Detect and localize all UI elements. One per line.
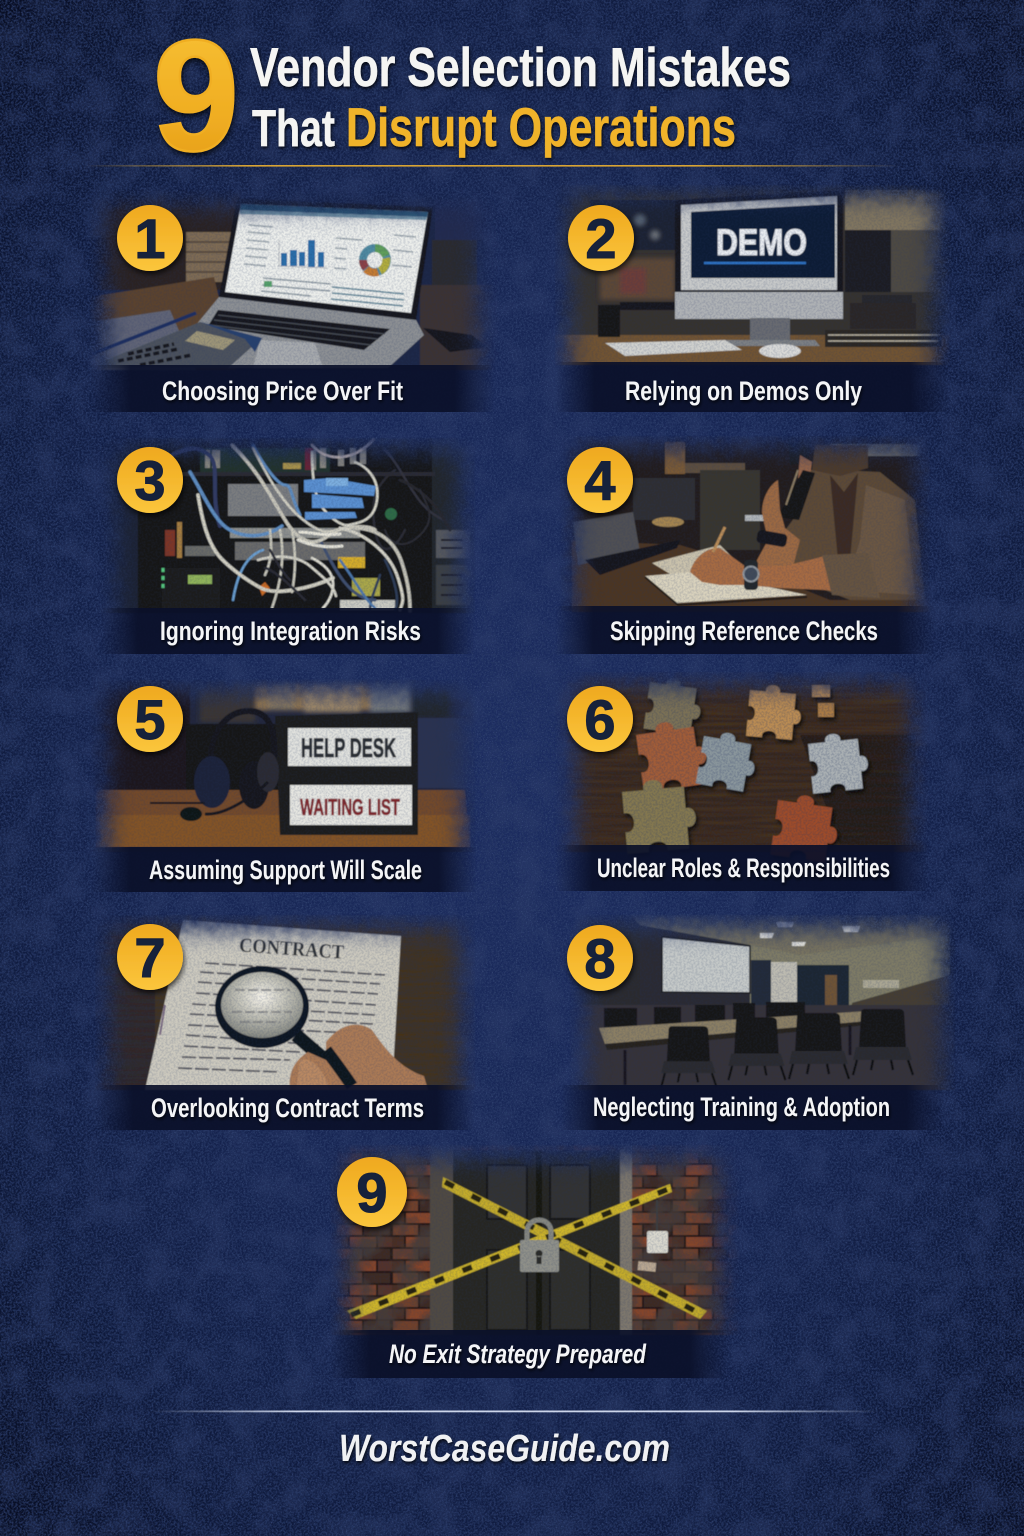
door — [453, 1150, 620, 1335]
magnifying glass — [296, 1035, 354, 1085]
number badge 1: 1 — [134, 207, 166, 270]
panel 3: ignoring integration risks — [100, 438, 475, 654]
chairs far row — [604, 1002, 805, 1033]
number badge 6 — [567, 686, 633, 752]
raised arm — [756, 480, 800, 566]
scene: contract under magnifying glass — [95, 915, 475, 1090]
table — [599, 1010, 884, 1044]
scene: headset and signs: HELP DESK — [301, 733, 396, 763]
caption bar — [555, 845, 930, 891]
caption bar — [555, 362, 950, 412]
number badge 9: 9 — [356, 1161, 388, 1224]
caption bar — [555, 606, 935, 654]
hand — [290, 1025, 428, 1090]
number badge 3: 3 — [134, 449, 166, 512]
caption: Choosing Price Over Fit — [162, 376, 403, 406]
calculator — [106, 322, 252, 365]
wall box — [656, 1200, 658, 1232]
chairs near row — [661, 1026, 716, 1087]
number badge 7 — [117, 924, 183, 990]
caption bar — [100, 608, 475, 654]
panel 2: relying on demos only — [555, 185, 951, 412]
caption bar — [92, 847, 477, 892]
panel 9: no exit strategy prepared — [330, 1145, 740, 1378]
number badge 6: 6 — [584, 688, 616, 751]
number badge 4 — [567, 447, 633, 513]
scene: laptop and calculator — [90, 190, 500, 370]
scene: headset and signs — [90, 680, 475, 852]
caption: Assuming Support Will Scale — [149, 855, 422, 885]
scene: empty training room — [570, 915, 955, 1090]
sign frame — [275, 712, 418, 835]
big numeral 9: 9 — [153, 8, 239, 184]
writing arm and watch — [690, 547, 832, 592]
notebook — [652, 544, 732, 574]
caption: Ignoring Integration Risks — [160, 616, 421, 646]
caption: Skipping Reference Checks — [610, 616, 878, 646]
waiting list sign — [290, 785, 412, 825]
demo text: DEMO — [716, 222, 807, 263]
number badge 3 — [117, 447, 183, 513]
scene: headset and signs: WAITING LIST — [300, 794, 400, 820]
scene: tangled server cables — [100, 438, 475, 613]
caption: Neglecting Training & Adoption — [593, 1092, 890, 1122]
help desk sign — [288, 728, 411, 766]
caption bar — [560, 1085, 945, 1130]
caution tape — [442, 1177, 707, 1319]
contract heading: CONTRACT — [238, 934, 345, 964]
caption bar — [90, 365, 495, 412]
scene: scattered puzzle pieces — [555, 672, 930, 863]
number badge 7: 7 — [134, 926, 166, 989]
panel 4: skipping reference checks — [555, 436, 935, 654]
caption bar — [330, 1330, 730, 1378]
title — [153, 8, 791, 184]
scene: man on phone taking notes — [560, 436, 930, 612]
title highlight: Disrupt Operations — [346, 96, 736, 158]
puzzle pieces — [621, 675, 870, 863]
caption: Overlooking Contract Terms — [151, 1093, 424, 1123]
number badge 9 — [337, 1157, 407, 1227]
scene: demo monitor — [555, 185, 951, 365]
panel 7: overlooking contract terms — [95, 915, 475, 1130]
laptop — [219, 198, 433, 320]
number badge 2: 2 — [585, 207, 617, 270]
footer website: WorstCaseGuide.com — [339, 1428, 670, 1470]
head — [812, 445, 868, 476]
number badge 8: 8 — [584, 927, 616, 990]
panel 5: assuming support will scale — [90, 680, 477, 892]
number badge 5 — [117, 686, 183, 752]
padlock — [527, 1220, 551, 1241]
whiteboard — [662, 937, 750, 993]
shirt — [778, 470, 925, 600]
number badge 5: 5 — [134, 688, 166, 751]
caption: No Exit Strategy Prepared — [389, 1339, 646, 1369]
monitor — [674, 191, 843, 292]
caption: Relying on Demos Only — [625, 376, 862, 406]
title line 1: Vendor Selection Mistakes — [250, 36, 791, 98]
panel 6: unclear roles and responsibilities — [555, 672, 930, 891]
title line 2: That — [252, 100, 335, 158]
number badge 2 — [568, 205, 634, 271]
number badge 1 — [117, 205, 183, 271]
paper — [145, 920, 401, 1090]
panel 1: choosing price over fit — [90, 190, 500, 412]
number badge 4: 4 — [584, 449, 616, 512]
scene: padlocked door with caution tape — [330, 1145, 740, 1335]
panel 8: neglecting training and adoption — [560, 915, 955, 1130]
caption bar — [95, 1085, 475, 1130]
headset — [211, 711, 274, 778]
caption: Unclear Roles & Responsibilities — [597, 853, 890, 883]
phone — [778, 470, 815, 520]
number badge 8 — [567, 925, 633, 991]
